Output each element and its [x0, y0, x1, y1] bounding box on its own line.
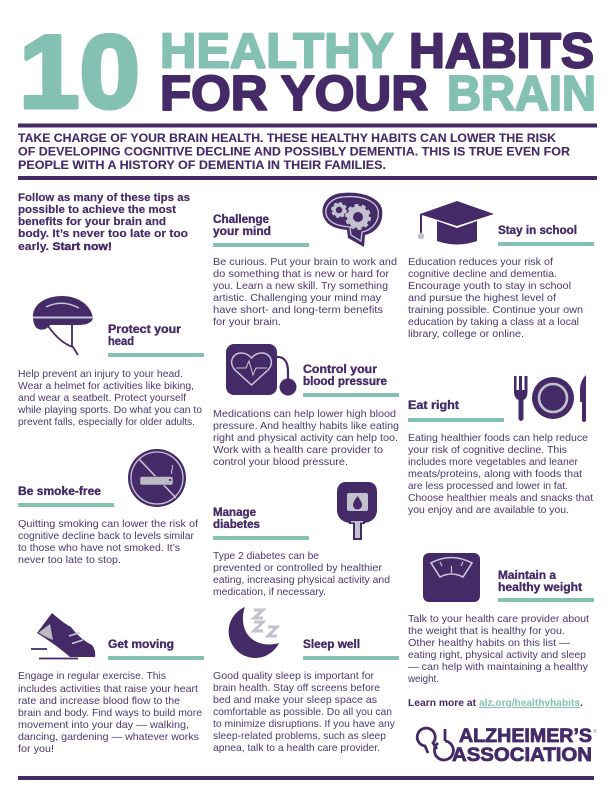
body text: rate and increase blood flow to the [18, 696, 180, 707]
body text: Work with a health care provider to [213, 445, 383, 456]
heading: Be smoke-free [18, 485, 102, 498]
body text: Eating healthier foods can help reduce [408, 433, 588, 444]
body text: right and physical activity can help too. [213, 433, 398, 444]
heading: Manage [213, 506, 257, 519]
body text: have short- and long-term benefits [213, 305, 383, 316]
heading: head [108, 335, 134, 348]
body text: cognitive decline and dementia. [408, 269, 557, 280]
heading: healthy weight [498, 581, 582, 594]
body text: Quitting smoking can lower the risk of [18, 519, 198, 530]
subtitle [18, 131, 570, 172]
heading: Protect your [108, 323, 182, 336]
body text [18, 519, 198, 566]
body text: Other healthy habits on this list — [408, 638, 571, 649]
title: FOR YOUR [160, 67, 428, 121]
body text: for you! [18, 744, 54, 755]
logo: Alzheimer's Association: ® [593, 728, 597, 735]
icon: graduation cap [418, 201, 494, 244]
body text: comfortable as possible. Do all you can [213, 707, 392, 718]
heading [108, 323, 182, 348]
body text: control your blood pressure. [213, 457, 348, 468]
body text [213, 551, 390, 598]
body text: prevent falls, especially for older adults. [18, 417, 195, 428]
learn more link: . [580, 698, 583, 709]
body text: while playing sports. Do what you can to [17, 405, 202, 416]
body text: Medications can help lower high blood [213, 409, 396, 420]
icon: brain with gears [323, 193, 382, 247]
intro text: early. Start now! [18, 241, 112, 253]
heading: Stay in school [498, 224, 577, 237]
panel: stay in school [408, 201, 594, 340]
body text: sleep-related problems, such as sleep [213, 731, 386, 742]
body text: to those who have not smoked. It’s [18, 543, 180, 554]
body text: to minimize disruptions. If you have any [213, 719, 396, 730]
body text: prevented or controlled by healthier [213, 563, 383, 574]
icon: moon and Zs [229, 607, 279, 658]
body text: — can help with maintaining a healthy [408, 662, 589, 673]
body text: dancing, gardening — whatever works [18, 732, 199, 743]
body text: are less processed and lower in fat. [408, 481, 568, 492]
intro text [18, 192, 190, 253]
learn more link [408, 698, 583, 709]
intro text: body. It’s never too late or too [18, 228, 188, 240]
heading: blood pressure [303, 375, 388, 388]
logo: Alzheimer's Association: ALZHEIMER’S [459, 726, 592, 747]
heading [213, 506, 260, 531]
body text: Engage in regular exercise. This [18, 671, 166, 682]
heading: Challenge [213, 213, 270, 226]
body text: movement into your day — walking, [18, 720, 189, 731]
heading: Eat right [408, 399, 459, 412]
body text: Encourage youth to stay in school [408, 281, 571, 292]
body text: medication, if necessary. [213, 587, 326, 598]
body text: and wear a seatbelt. Protect yourself [18, 393, 186, 404]
body text: Choose healthier meals and snacks that [408, 493, 593, 504]
body text: Education reduces your risk of [408, 257, 553, 268]
icon: blood pressure monitor [226, 344, 296, 396]
subtitle: PEOPLE WITH A HISTORY OF DEMENTIA IN THEIR FAMILIES. [18, 158, 386, 172]
body text [213, 409, 399, 468]
title: HEALTHY [160, 24, 394, 78]
title: HABITS [409, 24, 594, 78]
icon: shoe [31, 613, 95, 658]
title [19, 14, 596, 130]
body text [408, 257, 583, 340]
body text: apnea, talk to a health care provider. [213, 743, 380, 754]
heading: your mind [213, 225, 271, 238]
body text: Wear a helmet for activities like biking, [18, 381, 194, 392]
subtitle: OF DEVELOPING COGNITIVE DECLINE AND POSSIBLY DEMENTIA. THIS IS TRUE EVEN FOR [18, 144, 570, 158]
heading: Control your [303, 363, 378, 376]
body text: eating, increasing physical activity and [213, 575, 390, 586]
body text: library, college or online. [408, 329, 524, 340]
heading: Get moving [108, 638, 174, 651]
panel: maintain a healthy weight [407, 553, 594, 685]
intro text: benefits for your brain and [18, 216, 166, 228]
body text: Help prevent an injury to your head. [18, 369, 183, 380]
panel: control your blood pressure [213, 344, 399, 468]
body text: bed and make your sleep space as [213, 695, 377, 706]
body text: artistic. Challenging your mind may [213, 293, 382, 304]
icon: fork, plate and knife [514, 375, 586, 422]
intro text: possible to achieve the most [18, 204, 176, 216]
learn more link: Learn more at [408, 698, 477, 709]
subtitle: TAKE CHARGE OF YOUR BRAIN HEALTH. THESE HEALTHY HABITS CAN LOWER THE RISK [18, 131, 556, 145]
body text: education by taking a class at a local [408, 317, 579, 328]
heading [303, 363, 388, 388]
icon: bathroom scale [423, 553, 480, 602]
heading: diabetes [213, 518, 260, 531]
body text [213, 671, 396, 754]
panel: challenge your mind [213, 193, 397, 328]
panel: manage diabetes [213, 482, 390, 598]
body text: you enjoy and are available to you. [408, 505, 569, 516]
body text: and pursue the highest level of [408, 293, 556, 304]
body text: meats/proteins, along with foods that [408, 469, 582, 480]
learn more link: alz.org/healthyhabits [479, 698, 580, 709]
body text [407, 614, 589, 685]
intro text: Follow as many of these tips as [18, 192, 190, 204]
logo: Alzheimer's Association: ASSOCIATION [452, 745, 592, 766]
body text: cognitive decline back to levels similar [18, 531, 195, 542]
body text: do something that is new or hard for [213, 269, 390, 280]
title: 10 [19, 14, 140, 130]
body text: you. Learn a new skill. Try something [213, 281, 388, 292]
body text [408, 433, 593, 516]
body text: pressure. And healthy habits like eating [213, 421, 399, 432]
body text: includes activities that raise your heart [18, 684, 198, 695]
title: BRAIN [447, 67, 596, 121]
body text: for your brain. [213, 317, 281, 328]
body text: weight. [407, 674, 439, 685]
body text: Be curious. Put your brain to work and [213, 257, 397, 268]
body text: Talk to your health care provider about [408, 614, 589, 625]
body text: the weight that is healthy for you. [408, 626, 565, 637]
body text: brain and body. Find ways to build more [18, 708, 202, 719]
icon: helmet [33, 296, 93, 355]
icon: no smoking [128, 449, 186, 507]
heading [498, 569, 582, 594]
heading: Maintain a [498, 569, 557, 582]
body text: never too late to stop. [18, 555, 121, 566]
body text: Good quality sleep is important for [213, 671, 375, 682]
logo: Alzheimer's Association [417, 726, 597, 766]
body text: your risk of cognitive decline. This [408, 445, 567, 456]
icon: glucose meter [337, 482, 377, 540]
body text: eating right, physical activity and sleep [408, 650, 586, 661]
heading: Sleep well [303, 638, 360, 651]
body text [17, 369, 202, 428]
panel: sleep well [213, 607, 399, 754]
panel: get moving [18, 613, 204, 755]
body text: training possible. Continue your own [408, 305, 583, 316]
body text [213, 257, 397, 328]
body text [18, 671, 202, 755]
body text: brain health. Stay off screens before [213, 683, 380, 694]
heading [213, 213, 271, 238]
body text: includes more vegetables and leaner [408, 457, 579, 468]
panel: eat right [408, 375, 593, 516]
body text: Type 2 diabetes can be [213, 551, 319, 562]
panel: be smoke-free [18, 449, 198, 566]
panel: protect your head [17, 296, 204, 428]
